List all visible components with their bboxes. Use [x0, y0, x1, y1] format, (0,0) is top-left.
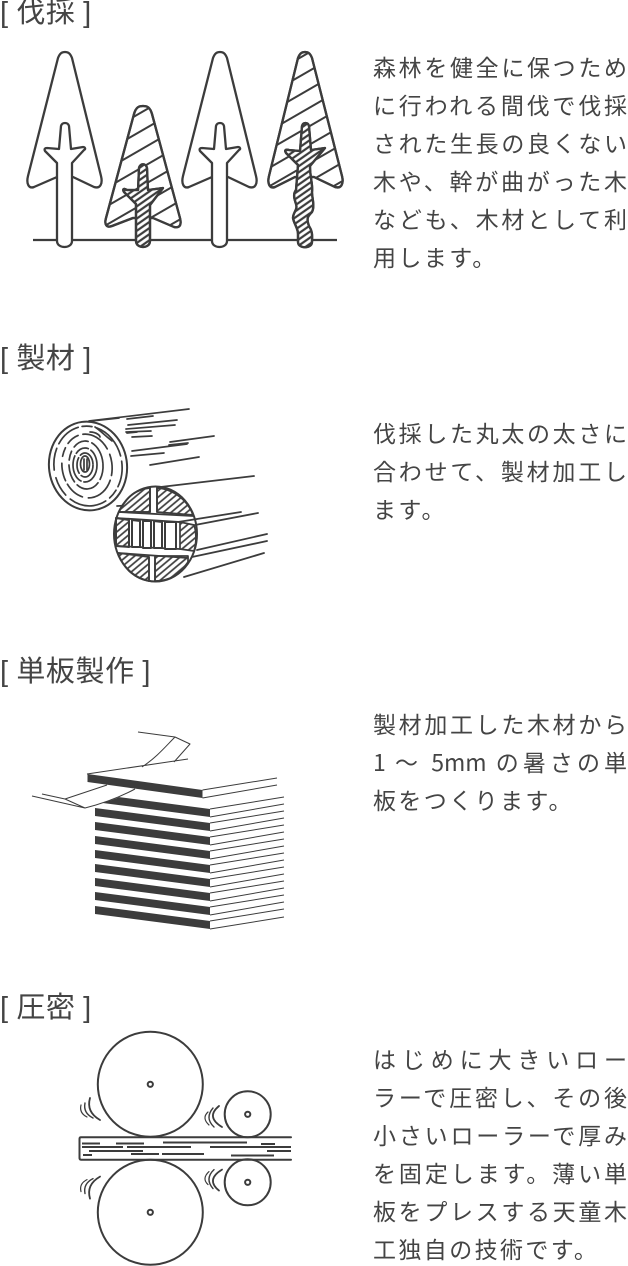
text: veneer: 板をつくります。: [373, 782, 574, 816]
illustration: veneer stack: [32, 732, 284, 929]
illustration: forest thinning: [27, 52, 343, 247]
log end: growth rings: [43, 417, 133, 515]
large roller top: [98, 1032, 203, 1137]
small roller top: [225, 1091, 271, 1137]
tree: healthy 2: [182, 52, 257, 247]
tree: healthy 1: [27, 52, 102, 247]
text: compression: を固定します。薄い単: [373, 1155, 627, 1189]
text: thinning: 木や、幹が曲がった木: [373, 163, 627, 197]
text: veneer: 製材加工した木材から: [373, 706, 627, 740]
tree: thinned small: [105, 106, 181, 247]
text: compression: 板をプレスする天童木: [373, 1193, 627, 1227]
text: thinning: 森林を健全に保つため: [373, 49, 627, 83]
illustration: sawn logs: [43, 409, 267, 582]
text: compression: 工独自の技術です。: [373, 1231, 599, 1265]
dark plates: [95, 794, 210, 929]
text: sawing: 合わせて、製材加工し: [373, 453, 627, 487]
text: thinning: に行われる間伐で伐採: [373, 87, 627, 121]
text: compression: 小さいローラーで厚み: [373, 1117, 627, 1151]
text: thinning: なども、木材として利: [373, 201, 627, 235]
small roller bottom: [225, 1159, 271, 1205]
illustration: rollers: [80, 1032, 291, 1265]
log lines: [89, 409, 254, 506]
text: thinning: された生長の良くない: [373, 125, 627, 159]
text: thinning: [373, 49, 627, 273]
text: compression: はじめに大きいロー: [373, 1041, 627, 1075]
text: sawing: ます。: [373, 491, 447, 525]
stacked side lines: [210, 797, 284, 929]
text: veneer: 1 〜 5mm の暑さの単: [373, 744, 627, 778]
motion marks: [81, 1098, 222, 1199]
large roller bottom: [98, 1160, 203, 1265]
text: sawing: [373, 415, 627, 525]
text: veneer: [373, 706, 627, 816]
heading: 圧密: [ 圧密 ]: [0, 992, 92, 1024]
compressed board: [80, 1137, 291, 1160]
top plate: [88, 774, 202, 798]
text: thinning: 用します。: [373, 239, 498, 273]
top plate side lines: [202, 778, 277, 798]
text: sawing: 伐採した丸太の太さに: [373, 415, 627, 449]
heading: 単板製作: [ 単板製作 ]: [0, 656, 151, 688]
text: compression: [373, 1041, 627, 1265]
sawn log section: [114, 486, 267, 582]
ground line: [33, 239, 337, 241]
tree: crooked: [268, 52, 343, 247]
text: compression: ラーで圧密し、その後: [373, 1079, 627, 1113]
veneer sheet: [32, 732, 190, 808]
heading: 製材: [ 製材 ]: [0, 343, 92, 375]
